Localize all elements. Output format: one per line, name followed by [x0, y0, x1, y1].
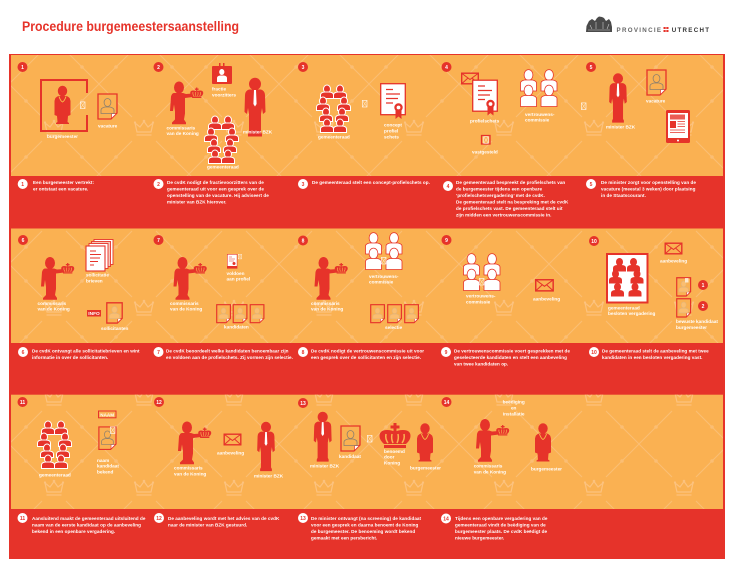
label: commissaris van de Koning: commissaris — [174, 466, 203, 471]
panel: step 1 — [18, 62, 118, 192]
panel: step 11 — [18, 397, 146, 534]
icon: gemeenteraad — [316, 85, 350, 132]
caption 14: 14 — [443, 516, 449, 522]
label: benoemd door Koning: door — [384, 455, 395, 460]
panel: step 10 — [589, 236, 718, 360]
icon: vacature — [98, 94, 117, 119]
caption 13: De minister ontvangt (na screening) de kandidaat — [311, 516, 422, 521]
label: kandidaten: kandidaten — [224, 325, 249, 330]
badge 2: 2 — [157, 65, 160, 71]
icon: burgemeester in frame — [41, 80, 87, 131]
icon: vertrouwenscommissie — [464, 254, 500, 290]
caption 6: 6 — [22, 350, 25, 356]
caption 4: 4 — [447, 184, 450, 190]
caption 5: 5 — [590, 182, 593, 188]
panel: step 12 — [154, 397, 284, 527]
label: concept profielschets: profiel — [384, 128, 398, 134]
badge 7: 7 — [157, 238, 160, 244]
label: vertrouwenscommissie: commissie — [369, 280, 394, 285]
label: beëdiging en installatie: beëdiging — [503, 400, 525, 405]
label: beëdiging en installatie: en — [511, 405, 517, 410]
caption 6 — [18, 347, 140, 360]
label: voldoen aan profiel: aan profiel — [226, 277, 250, 282]
label: burgemeester: burgemeester — [531, 466, 562, 471]
caption 2: gemeenteraad uit voor een gesprek over de — [167, 186, 264, 192]
label: sollicitanten: sollicitanten — [101, 326, 128, 331]
badge 2 — [154, 62, 164, 72]
caption 13: de burgemeester. De benoeming wordt bekend — [311, 529, 415, 534]
orange band 1 — [11, 55, 723, 176]
icon: kandidaten — [217, 305, 264, 323]
panel: step 2 — [154, 62, 273, 204]
caption 9: van twee kandidaten op. — [454, 362, 508, 366]
logo: Provincie Utrecht — [586, 16, 709, 34]
label: vertrouwenscommissie: vertrouwens- — [466, 294, 496, 299]
icon: burgemeester — [535, 423, 551, 462]
caption 7: De cvdK beoordeelt welke kandidaten benoembaar zijn — [166, 348, 289, 354]
caption 4: zijn midden een vertrouwenscommissie in. — [456, 212, 551, 218]
caption 4: De gemeenteraad bespreekt de profielschets van — [456, 180, 565, 185]
label: concept profielschets: concept — [384, 123, 402, 128]
icon: gemeenteraad besloten vergadering — [607, 254, 648, 302]
label: aanbeveling: aanbeveling — [217, 451, 244, 456]
caption 14 — [441, 514, 548, 540]
badge 12: 12 — [156, 400, 162, 406]
label: benoemde kandidaat burgemeester: burgemeester — [676, 325, 707, 330]
tag: INFO: INFO — [88, 311, 100, 317]
panel: step 8 — [298, 233, 424, 360]
badge 8: 8 — [302, 238, 305, 244]
caption 2: De cvdK nodigt de fractievoorzitters van de — [167, 180, 264, 185]
caption 2: openstelling van de vacature. Hij adviseert de — [167, 193, 269, 198]
panel: step 3 — [298, 62, 430, 189]
badge 3: 3 — [302, 65, 305, 71]
icon: commissaris van de Koning — [41, 257, 74, 300]
label: vacature: vacature — [646, 99, 666, 104]
caption 7: 7 — [157, 350, 160, 356]
label: gemeenteraad: gemeenteraad — [39, 472, 71, 477]
badge 14 — [442, 397, 452, 407]
caption 11: bekend in een openbare vergadering. — [32, 529, 115, 534]
label: naam kandidaat bekend: naam — [97, 458, 109, 463]
caption 14: nieuwe burgemeester. — [455, 535, 504, 540]
icon: gemeenteraad — [204, 116, 238, 164]
caption 2: 2 — [157, 182, 160, 188]
icon: fractievoorzitters badge — [212, 63, 232, 84]
badge 6: 6 — [22, 238, 25, 244]
caption 11: naam van de eerste kandidaat op de aanbeveling — [32, 522, 141, 527]
icon: kandidaat 2 — [677, 299, 691, 317]
caption 10: 10 — [591, 350, 597, 356]
caption 2 — [154, 179, 269, 204]
caption 1: 1 — [21, 182, 24, 188]
label: commissaris van de Koning: van de Koning — [174, 471, 206, 476]
panel: step 7 — [154, 235, 293, 360]
icon: selectie — [371, 305, 418, 323]
caption 11 — [18, 513, 146, 534]
badge 1: 1 — [21, 65, 24, 71]
label: minister BZK: minister BZK — [310, 464, 340, 469]
icon: vastgesteld box — [482, 136, 490, 144]
caption 10 — [589, 347, 709, 360]
badge 13 — [298, 398, 308, 408]
caption 5: vacature (meestal 3 weken) door plaatsing — [601, 186, 696, 192]
caption 13: gemaakt met een persbericht. — [311, 535, 377, 540]
caption 5 — [586, 179, 696, 198]
label: commissaris van de Koning: van de Koning — [311, 307, 343, 312]
label: commissaris van de Koning: van de Koning — [170, 307, 202, 312]
arrow marker — [367, 435, 372, 442]
caption 14: burgemeester plaats. De cvdK beëdigt de — [455, 529, 547, 534]
caption 3: 3 — [302, 182, 305, 188]
icon: vertrouwenscommissie — [520, 70, 557, 106]
panel: step 4 — [442, 62, 569, 218]
caption 4: ‘profielschetsvergadering’ met de cvdK. — [456, 193, 545, 198]
caption 13: voor een gesprek en daarna benoemt de Koning — [311, 522, 419, 527]
label: commissaris van de Koning: van de Koning — [474, 470, 506, 475]
label: voldoen aan profiel: voldoen — [226, 271, 245, 276]
icon: commissaris van de Koning — [476, 419, 509, 462]
badge 14: 14 — [444, 400, 449, 406]
label: aanbeveling: aanbeveling — [660, 259, 687, 264]
label: minister BZK: minister BZK — [254, 474, 284, 479]
label: benoemde kandidaat burgemeester: bewuste kandidaat — [676, 319, 718, 324]
label: commissaris van de Koning: commissaris — [38, 301, 67, 306]
label: benoemd door Koning: Koning — [384, 461, 400, 466]
caption 12 — [154, 513, 280, 527]
caption 4 — [443, 180, 569, 218]
caption 9: 9 — [445, 350, 448, 356]
arrow marker — [479, 278, 484, 285]
orange band 3 — [11, 395, 723, 509]
caption 9 — [441, 347, 570, 366]
caption 8 — [298, 347, 424, 360]
panel: step 9 — [441, 235, 570, 366]
icon: vertrouwenscommissie — [366, 233, 402, 270]
label: fractievoorzitters: fractie — [212, 86, 226, 92]
icon: minister BZK — [314, 412, 332, 462]
icon: sollicitatiebrieven — [86, 240, 113, 271]
icon: aanbeveling envelope — [665, 243, 682, 254]
logo: Provincie Utrecht: UTRECHT — [672, 27, 709, 34]
badge 5: 5 — [590, 65, 593, 71]
caption 1: Een burgemeester vertrekt: — [33, 180, 94, 185]
label: vacature: vacature — [98, 124, 118, 129]
icon: commissaris van de Koning — [314, 257, 348, 300]
icon: concept profielschets — [381, 84, 405, 119]
icon: kandidaat — [341, 426, 360, 451]
panel: step 6 — [18, 235, 140, 360]
caption 4: De gemeenteraad stelt na bespreking met de cvdK — [456, 200, 569, 204]
label: commissaris van de Koning: van de Koning — [38, 307, 70, 312]
badge 13: 13 — [300, 401, 306, 407]
caption 14: Tijdens een openbare vergadering van de — [455, 516, 548, 521]
caption 7 — [154, 347, 293, 360]
label: commissaris van de Koning: commissaris — [170, 301, 199, 306]
caption 13: 13 — [300, 516, 306, 522]
badge 9: 9 — [445, 238, 448, 244]
caption 11: Aansluitend maakt de gemeenteraad uitsluitend de — [32, 516, 146, 521]
label: profielschets: profielschets — [470, 119, 500, 124]
caption 8: een gesprek over de sollicitanten en zijn selectie. — [311, 355, 421, 360]
logo: Provincie Utrecht: PROVINCIE — [616, 27, 661, 34]
icon: minister BZK — [609, 73, 627, 123]
arrow marker — [581, 103, 586, 110]
caption 6: De cvdK ontvangt alle sollicitatiebrieven en wint — [32, 348, 140, 354]
icon: tablet with Staatscourant — [666, 110, 690, 143]
label: commissaris van de Koning: commissaris — [474, 464, 503, 469]
icon: envelope — [462, 73, 478, 84]
icon: aanbeveling envelope — [536, 280, 553, 291]
arrow marker — [238, 254, 242, 259]
caption 10: kandidaten in een besloten vergadering vast. — [602, 355, 702, 360]
icon: gemeenteraad — [38, 421, 72, 468]
icon: crown — [380, 423, 410, 448]
icon: minister BZK — [257, 422, 275, 471]
badge 4: 4 — [445, 65, 448, 71]
label: burgemeester: burgemeester — [47, 134, 78, 139]
orange band 2 — [11, 228, 723, 343]
label: vertrouwenscommissie: commissie — [466, 299, 491, 304]
title: Procedure burgemeestersaanstelling — [22, 19, 239, 34]
caption 8: 8 — [302, 350, 305, 356]
caption 8: De cvdK nodigt de vertrouwenscommissie uit voor — [311, 348, 424, 354]
label: selectie: selectie — [385, 325, 403, 330]
icon: commissaris van de Koning — [178, 422, 211, 464]
caption 6: informatie in over de sollicitanten. — [32, 355, 108, 360]
badge: kandidaat 1: 1 — [702, 283, 705, 289]
label: gemeenteraad besloten vergadering: besloten vergadering — [608, 311, 656, 316]
badge 11: 11 — [20, 400, 25, 406]
label: vertrouwenscommissie: vertrouwens- — [525, 112, 555, 117]
badge 10: 10 — [591, 239, 597, 245]
label: commissaris van de Koning: commissaris — [166, 126, 196, 130]
arrow marker — [362, 100, 367, 107]
icon: naam kandidaat — [99, 427, 116, 449]
label: gemeenteraad: gemeenteraad — [318, 135, 350, 140]
icon: vacature — [647, 70, 666, 95]
caption 2: minister van BZK hierover. — [167, 200, 227, 204]
label: kandidaat: kandidaat — [339, 454, 361, 459]
label: minister BZK: minister BZK — [243, 130, 273, 135]
caption 12: 12 — [156, 516, 162, 522]
caption 3 — [298, 179, 430, 189]
caption 9: De vertrouwenscommissie voert gesprekken met de — [454, 348, 570, 354]
icon: profile document — [227, 254, 237, 268]
label: gemeenteraad: gemeenteraad — [207, 165, 239, 170]
icon: aanbeveling envelope — [224, 434, 241, 445]
panel: step 14 — [441, 397, 562, 540]
badge 4 — [442, 62, 452, 72]
label: minister BZK: minister BZK — [606, 125, 636, 130]
icon: commissaris van de Koning — [174, 257, 207, 300]
caption 3: De gemeenteraad stelt een concept-profielschets op. — [312, 180, 430, 185]
label: benoemd door Koning: benoemd — [384, 449, 405, 454]
label: burgemeester: burgemeester — [410, 465, 441, 470]
caption 4: de profielschets vast. De gemeenteraad stelt uit — [456, 206, 563, 211]
caption 12: De aanbeveling wordt met het advies van de cvdK — [168, 516, 280, 521]
panel: step 13 — [298, 398, 441, 540]
caption 13 — [298, 513, 422, 540]
caption 5: De minister zorgt voor openstelling van de — [601, 180, 696, 185]
label: sollicitatiebrieven: sollicitatie — [86, 273, 109, 278]
label: commissaris van de Koning: van de Koning — [166, 131, 199, 136]
label: gemeenteraad besloten vergadering: gemeenteraad — [608, 305, 640, 310]
caption 4: de burgemeester tijdens een openbare — [456, 186, 542, 192]
caption 11: 11 — [20, 516, 25, 522]
badge: kandidaat 2: 2 — [702, 304, 705, 310]
label: vertrouwenscommissie: vertrouwens- — [369, 274, 399, 279]
icon: kandidaat 1 — [677, 278, 691, 296]
icon: commissaris van de Koning — [170, 82, 203, 124]
arrow marker — [381, 257, 386, 264]
caption 14: gemeenteraad vindt de beëdiging van de — [455, 522, 546, 527]
icon: burgemeester — [417, 423, 433, 462]
caption 1 — [18, 179, 94, 192]
label: fractievoorzitters: voorzitters — [212, 92, 236, 97]
caption 5: in de Staatscourant. — [601, 193, 646, 198]
label: beëdiging en installatie: installatie — [503, 411, 525, 416]
caption 10: De gemeenteraad stelt de aanbeveling met twee — [602, 348, 709, 354]
label: naam kandidaat bekend: kandidaat — [97, 464, 119, 469]
icon: sollicitant — [107, 303, 122, 323]
caption 1: er ontstaat een vacature. — [33, 186, 88, 192]
caption 7: en voldoen aan de profielschets. Zij vormen zijn selectie. — [166, 355, 293, 360]
label: commissaris van de Koning: commissaris — [311, 301, 340, 306]
label: sollicitatiebrieven: brieven — [86, 278, 103, 283]
label: aanbeveling: aanbeveling — [533, 297, 560, 302]
icon: minister BZK — [244, 78, 266, 136]
caption 12: naar de minister van BZK gestuurd. — [168, 522, 247, 527]
tag: NAAM: NAAM — [100, 412, 114, 417]
icon: profielschets — [473, 80, 497, 116]
label: concept profielschets: schets — [384, 134, 399, 139]
caption 9: geselecteerde kandidaten en stelt een aanbeveling — [454, 355, 567, 360]
panel: step 5 — [581, 62, 696, 198]
label: naam kandidaat bekend: bekend — [97, 469, 114, 474]
label: vertrouwenscommissie: commissie — [525, 118, 550, 123]
label: vastgesteld: vastgesteld — [472, 150, 498, 155]
